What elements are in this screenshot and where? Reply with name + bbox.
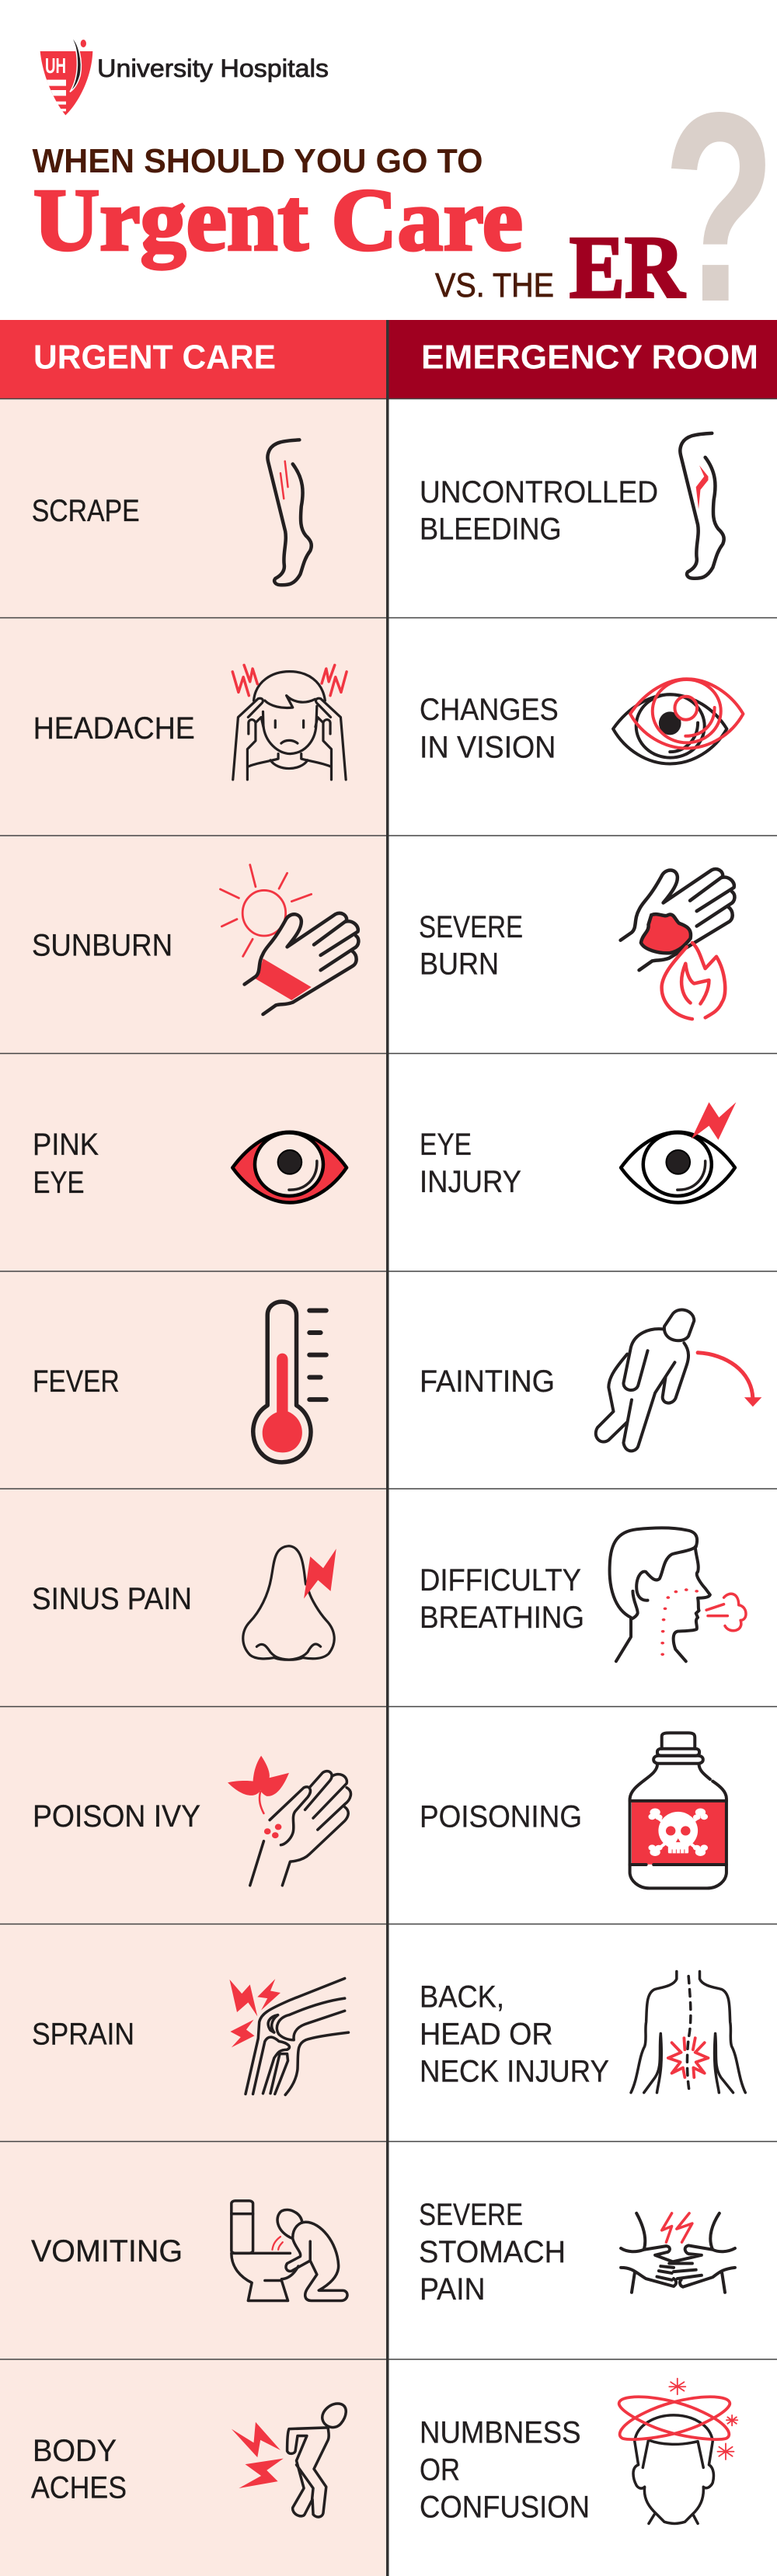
label: pink eye: EYE (33, 1166, 84, 1200)
label: fever: FEVER (33, 1364, 120, 1399)
label: severe stomach pain: SEVERE (419, 2198, 523, 2232)
icon: skull and crossbones (648, 1809, 708, 1856)
label: severe stomach pain (419, 2198, 566, 2307)
label: numbness or confusion: CONFUSION (420, 2490, 590, 2524)
icon: fainting person with arrow (596, 1310, 761, 1451)
label: uncontrolled bleeding: BLEEDING (420, 513, 562, 547)
label: severe burn: SEVERE (419, 910, 523, 944)
icon: dizzy head (619, 2379, 737, 2523)
label: poison ivy: POISON IVY (33, 1799, 200, 1834)
icon: sprained knee (229, 1978, 348, 2095)
label: body aches: BODY (33, 2434, 117, 2468)
heading: urgent care: URGENT CARE (33, 339, 276, 376)
label: back, head or neck injury: HEAD OR (420, 2018, 553, 2052)
title: urgent care: Urgent Care (33, 171, 523, 269)
logo initials: UH (45, 54, 66, 78)
label: pink eye (33, 1128, 99, 1200)
label: changes in vision: IN VISION (420, 730, 556, 764)
icon: person with back pain (232, 2404, 346, 2517)
icon: hands on stomach (621, 2213, 735, 2293)
header band: urgent care (0, 320, 387, 398)
icon: poison bottle (630, 1733, 726, 1888)
icon: bleeding leg (680, 433, 724, 579)
label: pink eye: PINK (33, 1128, 99, 1162)
label: changes in vision (420, 693, 559, 764)
icon: blurred eye (613, 679, 743, 764)
label: eye injury: EYE (420, 1128, 472, 1162)
label: eye injury (420, 1128, 521, 1199)
icon: injured eye with bolt (621, 1102, 736, 1203)
heading: emergency room: EMERGENCY ROOM (421, 339, 758, 376)
icon: red pink eye (232, 1132, 347, 1203)
label: sprain: SPRAIN (32, 2017, 134, 2051)
label: scrape: SCRAPE (32, 494, 140, 528)
label: eye injury: INJURY (420, 1165, 521, 1199)
panel: urgent care column (0, 398, 387, 2576)
label: sunburn: SUNBURN (32, 929, 172, 963)
label: poisoning: POISONING (420, 1800, 582, 1834)
logo: University Hospitals (40, 37, 329, 115)
label: headache: HEADACHE (33, 711, 195, 746)
label: uncontrolled bleeding (420, 475, 658, 547)
icon: head with difficulty breathing (610, 1528, 746, 1661)
icon: shield (40, 37, 92, 115)
label: difficulty breathing (420, 1563, 584, 1635)
label: changes in vision: CHANGES (420, 693, 559, 727)
title: vs. the: VS. THE (435, 267, 554, 304)
label: numbness or confusion: OR (420, 2453, 460, 2487)
label: uncontrolled bleeding: UNCONTROLLED (420, 475, 658, 509)
label: difficulty breathing: DIFFICULTY (420, 1563, 581, 1597)
icon: thermometer (253, 1302, 326, 1462)
label: back, head or neck injury: BACK, (420, 1980, 504, 2015)
label: back, head or neck injury: NECK INJURY (420, 2055, 609, 2089)
label: difficulty breathing: BREATHING (420, 1601, 584, 1635)
icon: back with spine injury (631, 1972, 745, 2093)
label: fainting: FAINTING (420, 1364, 555, 1399)
label: severe burn: BURN (420, 947, 499, 982)
icon: poison ivy leaf and hand (228, 1756, 350, 1886)
title question mark: ? (663, 57, 776, 359)
label: back, head or neck injury (420, 1980, 609, 2089)
label: body aches: ACHES (31, 2471, 127, 2505)
label: sinus pain: SINUS PAIN (32, 1582, 192, 1616)
label: severe stomach pain: STOMACH (419, 2235, 566, 2269)
icon: scraped leg (267, 440, 312, 585)
logo wordmark: University Hospitals (97, 54, 329, 82)
icon: nose with bolt (243, 1546, 336, 1660)
label: numbness or confusion (420, 2415, 590, 2524)
title: ER: ER (570, 217, 686, 316)
icon: burned hand and flame (621, 869, 734, 1019)
label: body aches (31, 2434, 127, 2505)
icon: person with headache (232, 665, 347, 780)
label: vomiting: VOMITING (31, 2234, 183, 2268)
title: when should you go to: WHEN SHOULD YOU GO TO (33, 143, 483, 180)
icon: sun and sunburned hand (220, 865, 358, 1014)
label: severe stomach pain: PAIN (420, 2272, 485, 2307)
label: numbness or confusion: NUMBNESS (420, 2415, 581, 2449)
label: severe burn (419, 910, 523, 982)
header band: emergency room (387, 320, 777, 398)
icon: person vomiting in toilet (232, 2201, 347, 2300)
